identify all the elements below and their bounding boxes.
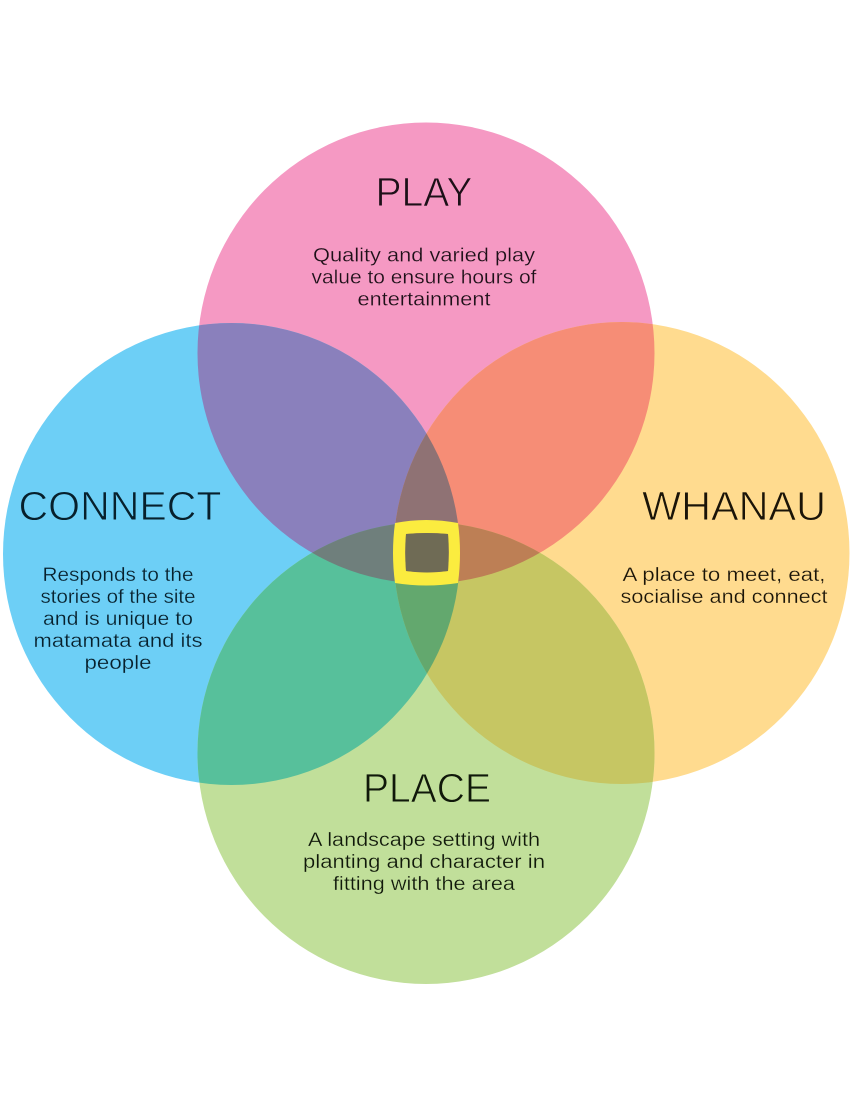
- text: whanau description: A place to meet, eat,: [622, 565, 826, 586]
- text: place description: [303, 830, 545, 895]
- overlap: connect, whanau and place: [396, 581, 458, 674]
- label: connect: [18, 483, 222, 674]
- text: connect description: Responds to the: [42, 565, 194, 586]
- label: whanau: [620, 483, 828, 608]
- text: whanau description: [620, 565, 828, 608]
- center square: [405, 533, 449, 572]
- overlap: play, whanau and place: [405, 524, 540, 582]
- text: play description: [312, 246, 537, 310]
- overlap: whanau and place: [396, 524, 654, 784]
- circle: connect: [3, 323, 460, 785]
- overlap: play and connect: [198, 323, 426, 553]
- text: play description: entertainment: [358, 290, 491, 310]
- overlap: play, connect and place: [312, 524, 395, 582]
- overlap: play and whanau: [396, 322, 654, 553]
- label: play: [312, 169, 537, 310]
- text: whanau description: socialise and connect: [620, 587, 828, 608]
- overlap: connect and place: [198, 524, 427, 785]
- text: play description: value to ensure hours of: [312, 268, 537, 288]
- overlap: play, connect and whanau: [396, 434, 458, 523]
- circle: whanau: [394, 322, 850, 784]
- text: play description: Quality and varied play: [313, 246, 536, 266]
- heading: connect: CONNECT: [18, 483, 222, 529]
- center square frame: [393, 520, 460, 586]
- text: connect description: people: [84, 653, 152, 674]
- venn diagram: [3, 122, 850, 984]
- text: place description: fitting with the area: [333, 874, 515, 895]
- text: connect description: matamata and its: [34, 631, 202, 652]
- label: place: [303, 765, 545, 895]
- circle: place: [198, 522, 654, 984]
- heading: whanau: WHANAU: [642, 483, 826, 529]
- heading: place: PLACE: [363, 765, 491, 811]
- text: connect description: [34, 565, 202, 674]
- text: connect description: and is unique to: [43, 609, 193, 630]
- text: place description: A landscape setting with: [308, 830, 540, 851]
- text: place description: planting and character in: [303, 852, 545, 873]
- circle: play: [198, 122, 654, 584]
- heading: play: PLAY: [376, 169, 472, 215]
- text: connect description: stories of the site: [40, 587, 196, 608]
